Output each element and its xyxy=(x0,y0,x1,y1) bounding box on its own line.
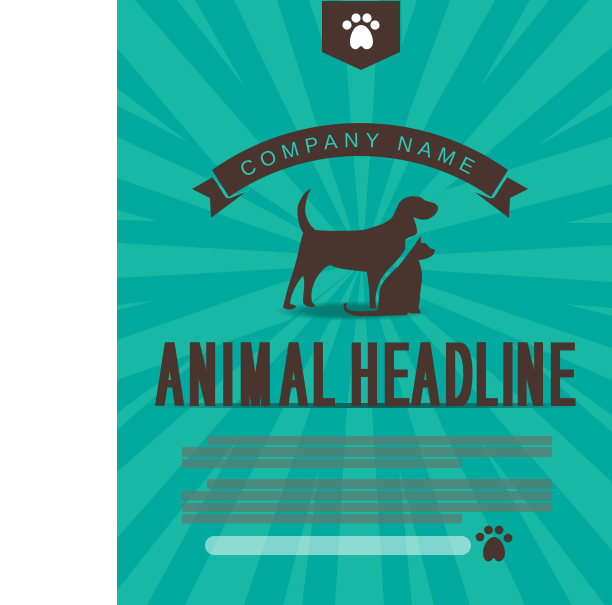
badge with paw xyxy=(322,1,400,70)
icon: white paw xyxy=(342,13,380,49)
button pill xyxy=(205,536,471,555)
headline: ANIMAL HEADLINE xyxy=(158,324,574,425)
text placeholder lines xyxy=(182,436,552,524)
headline shadow xyxy=(145,403,578,408)
ribbon banner xyxy=(192,123,528,218)
ribbon tails xyxy=(192,177,528,218)
icon: brown paw xyxy=(476,526,512,561)
company name: COMPANY NAME xyxy=(241,132,476,175)
ribbon band xyxy=(212,123,508,197)
dog silhouette xyxy=(283,189,438,309)
cat silhouette xyxy=(344,237,435,316)
dog shadow xyxy=(273,301,433,321)
